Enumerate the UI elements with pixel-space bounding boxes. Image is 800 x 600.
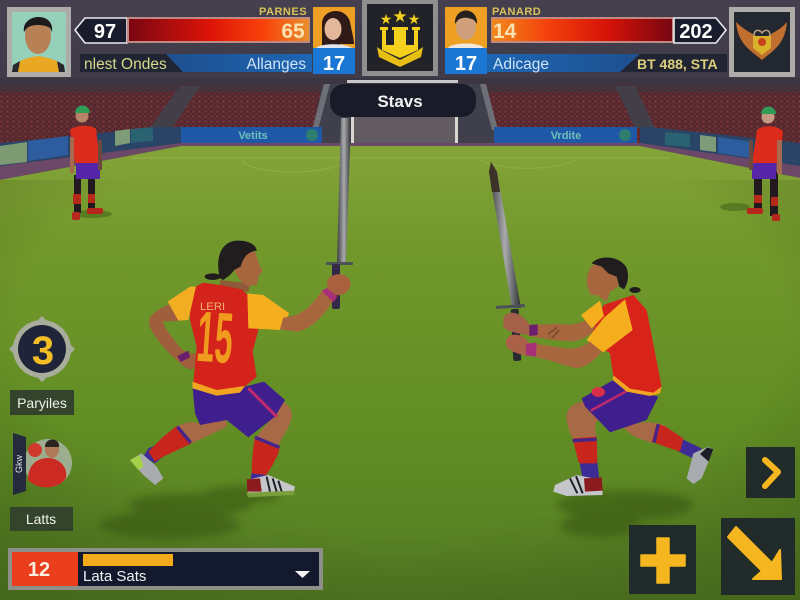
left info strip: Allanges xyxy=(247,56,306,73)
left score tag xyxy=(75,18,127,43)
right level box xyxy=(445,48,487,75)
pitch xyxy=(0,143,800,600)
top HUD: left team xyxy=(7,6,355,77)
left player name: PARNES xyxy=(259,6,307,18)
plus button xyxy=(629,525,696,594)
advertising boards: Vrdite xyxy=(551,130,581,142)
left health bar: 65 xyxy=(281,20,305,43)
right health bar xyxy=(491,17,674,43)
right level box: 17 xyxy=(455,53,477,75)
back arm xyxy=(149,304,206,369)
Stavs title pill: Stavs xyxy=(377,92,423,111)
top HUD: right team xyxy=(445,6,795,77)
stadium stands xyxy=(0,0,800,175)
right score tag: 202 xyxy=(679,21,713,43)
left level box xyxy=(313,48,355,75)
Paryiles label: Paryiles xyxy=(17,395,67,411)
upper arm and hand xyxy=(503,313,598,341)
left score tag: 97 xyxy=(94,21,116,43)
male player portrait xyxy=(445,7,487,48)
left fencer player: LERI xyxy=(200,301,225,313)
player token xyxy=(13,433,72,495)
left player sword xyxy=(326,118,353,309)
right info strip: Adicage xyxy=(493,56,549,73)
left level box: 17 xyxy=(323,53,345,75)
goal xyxy=(347,80,458,155)
right fencer player xyxy=(503,257,713,496)
Latts label xyxy=(10,507,73,531)
round number badge xyxy=(9,316,75,382)
right player name: PANARD xyxy=(492,6,541,18)
left fencer player: 15 xyxy=(194,296,236,379)
centre team emblem: ★ xyxy=(380,11,392,27)
right distant player xyxy=(720,107,783,221)
round number badge: 3 xyxy=(32,329,54,373)
advertising boards: Vetits xyxy=(238,130,268,142)
Stavs title pill xyxy=(330,84,476,117)
Latts label: Latts xyxy=(26,511,56,527)
right info strip xyxy=(487,54,727,73)
right info strip: BT 488, STA xyxy=(637,56,718,72)
left fencer player xyxy=(130,241,351,497)
right score tag xyxy=(674,18,726,43)
right health bar: 14 xyxy=(493,20,517,43)
player token: Gkw xyxy=(14,454,24,473)
centre team emblem xyxy=(362,0,438,76)
centre team emblem: ★ xyxy=(392,7,408,26)
bottom status bar xyxy=(8,548,323,590)
bottom status bar: Lata Sats xyxy=(83,568,146,585)
bottom status bar: 12 xyxy=(28,559,50,581)
left info strip: nlest Ondes xyxy=(84,56,167,73)
left health bar xyxy=(127,17,310,43)
opponent crest xyxy=(729,7,795,77)
female player portrait xyxy=(313,7,355,48)
left info strip xyxy=(80,54,312,73)
right player sword xyxy=(489,162,525,361)
advertising boards xyxy=(0,127,800,166)
ground shadows xyxy=(100,486,693,539)
Paryiles label xyxy=(10,390,74,415)
left distant player xyxy=(70,106,112,220)
left captain portrait xyxy=(7,7,71,77)
centre team emblem: ★ xyxy=(408,11,420,27)
chevron button xyxy=(746,447,795,498)
diagonal arrow button xyxy=(721,518,795,595)
